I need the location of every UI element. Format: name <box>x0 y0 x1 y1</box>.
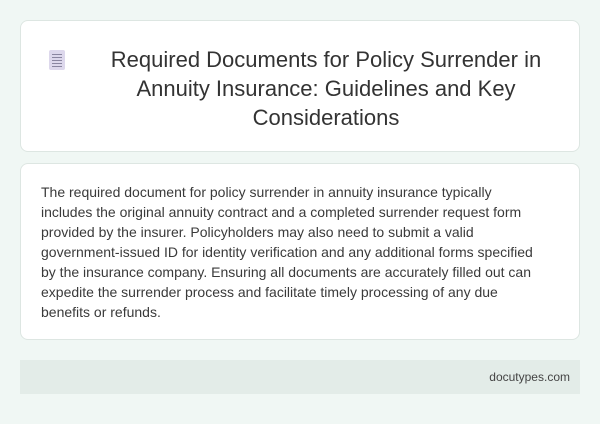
heading: Required Documents for Policy Surrender in Annuity Insurance: Guidelines and Key Considerations <box>111 47 541 130</box>
icon: document <box>49 50 65 70</box>
panel: description <box>20 163 580 340</box>
panel: title <box>20 20 580 152</box>
footer text: docutypes.com <box>489 370 570 384</box>
text block: The required document for policy surrender in annuity insurance typically includes the original annuity contract and a completed surrender request form provided by the insurer. Policyholders may also need to submit a valid government-issued ID for identity verification and any additional forms specified by the insurance company. Ensuring all documents are accurately filled out can expedite the surrender process and facilitate timely processing of any due benefits or refunds. <box>41 184 533 320</box>
footer <box>20 360 580 394</box>
